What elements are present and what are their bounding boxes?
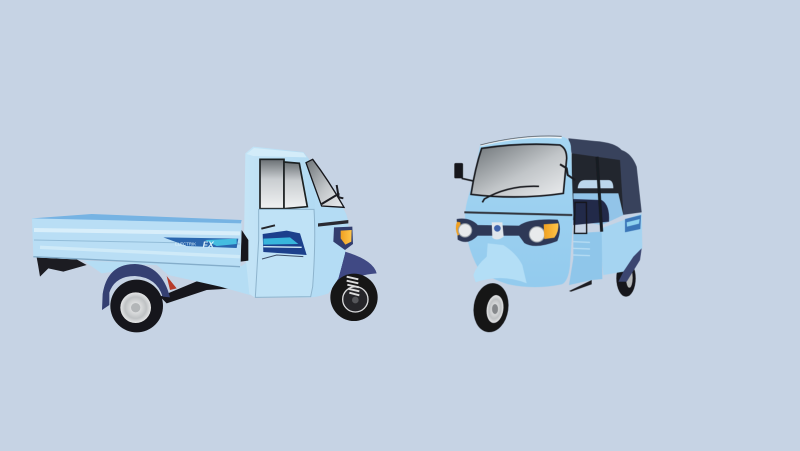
under-bed body [83,260,250,295]
right mirror [560,164,575,180]
mirror and handle [322,185,343,204]
right headlamp [529,227,545,242]
side decal [625,215,641,232]
pole [597,157,602,232]
roof highlight [247,148,307,157]
door decal [263,231,307,255]
wiper [482,186,539,202]
cargo bed side [32,218,242,267]
windshield [471,144,567,197]
vehicle: cargo pickup [32,147,378,332]
rear bumper and tow hitch [37,257,87,277]
step panel [569,232,602,285]
front wheel [330,274,378,321]
left mirror [454,163,463,178]
seat [573,193,623,225]
cabin interior [572,153,623,220]
headlamp [333,227,353,250]
headlamp bar [457,219,560,246]
rear body [601,213,642,275]
front fender [473,243,527,283]
rear window [578,180,613,188]
chassis [160,280,233,303]
wheel [470,281,512,335]
cab nose [311,160,348,297]
decal text: ELECTRIK [175,241,196,246]
front fender [337,252,377,282]
roof edge highlight [480,137,562,146]
suspension spring [347,277,359,295]
trim strip [464,212,572,215]
left headlamp [456,222,461,236]
front shell [465,136,573,287]
guard rail [574,202,587,233]
cargo bed inner [32,214,242,227]
door outline [255,209,315,297]
rear fender [102,264,170,310]
rear wheel [616,260,636,297]
vehicle: passenger auto rickshaw [454,136,642,335]
cab body [244,147,348,298]
door handle [261,225,275,229]
rear wheel [110,280,163,332]
door window [260,159,284,209]
bed decal [163,237,238,248]
center badge [492,222,504,239]
windshield [306,159,344,207]
vehicle: cargo pickup: FX [203,239,215,249]
cab back shadow [241,230,248,262]
black trim strip [318,220,348,227]
canopy [568,138,642,215]
